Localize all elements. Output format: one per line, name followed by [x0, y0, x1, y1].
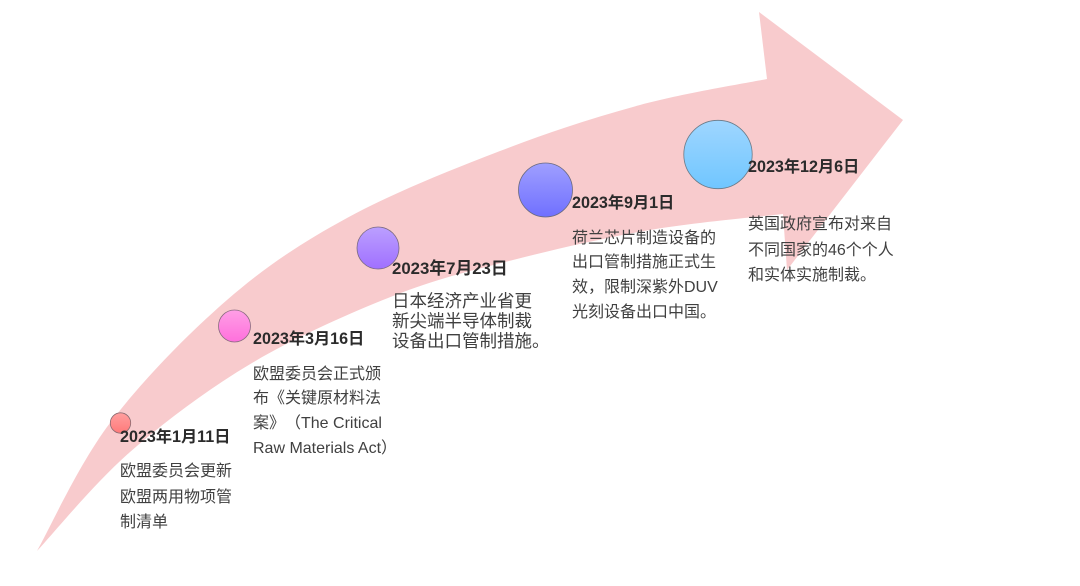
icon: milestone circle 3	[357, 227, 399, 269]
text: milestone 5 description	[748, 215, 894, 284]
text: milestone 4 description: 效，限制深紫外DUV	[572, 279, 718, 296]
text: milestone 2 description: 欧盟委员会正式颁	[253, 366, 381, 382]
date: 2023年12月6日: 2023年12月6日	[748, 158, 859, 176]
text: milestone 2 description: 布《关键原材料法	[253, 390, 381, 407]
text: milestone 2 description: Raw Materials Act）	[253, 440, 397, 457]
text: milestone 2 description	[253, 365, 397, 457]
icon: milestone circle 1	[110, 413, 131, 433]
text: milestone 5 description: 不同国家的46个个人	[748, 242, 894, 258]
text: milestone 5 description: 英国政府宣布对来自	[748, 216, 892, 233]
text: milestone 4 description	[572, 229, 718, 321]
icon: milestone circle 2	[218, 310, 250, 342]
icon: milestone circle 4	[518, 163, 572, 217]
date: 2023年7月23日: 2023年7月23日	[392, 259, 508, 278]
text: milestone 2 description: 案》（The Critical	[253, 415, 382, 432]
date: 2023年1月11日: 2023年1月11日	[120, 428, 230, 446]
text: milestone 1 description: 制清单	[120, 514, 168, 531]
text: milestone 3 description: 日本经济产业省更	[392, 291, 532, 311]
arrow: curved pink growth arrow	[37, 12, 903, 551]
date: 2023年9月1日: 2023年9月1日	[572, 194, 674, 212]
text: milestone 1 description	[120, 462, 232, 531]
text: milestone 1 description: 欧盟两用物项管	[120, 488, 232, 506]
icon: milestone circle 5	[684, 120, 752, 189]
text: milestone 3 description: 设备出口管制措施。	[392, 331, 550, 351]
text: milestone 1 description: 欧盟委员会更新	[120, 463, 232, 480]
text: milestone 4 description: 光刻设备出口中国。	[572, 304, 716, 321]
date: 2023年3月16日: 2023年3月16日	[253, 330, 364, 348]
text: milestone 3 description	[392, 291, 550, 351]
text: milestone 4 description: 荷兰芯片制造设备的	[572, 230, 716, 246]
text: milestone 4 description: 出口管制措施正式生	[572, 254, 716, 271]
text: milestone 5 description: 和实体实施制裁。	[748, 267, 876, 284]
text: milestone 3 description: 新尖端半导体制裁	[392, 311, 532, 331]
